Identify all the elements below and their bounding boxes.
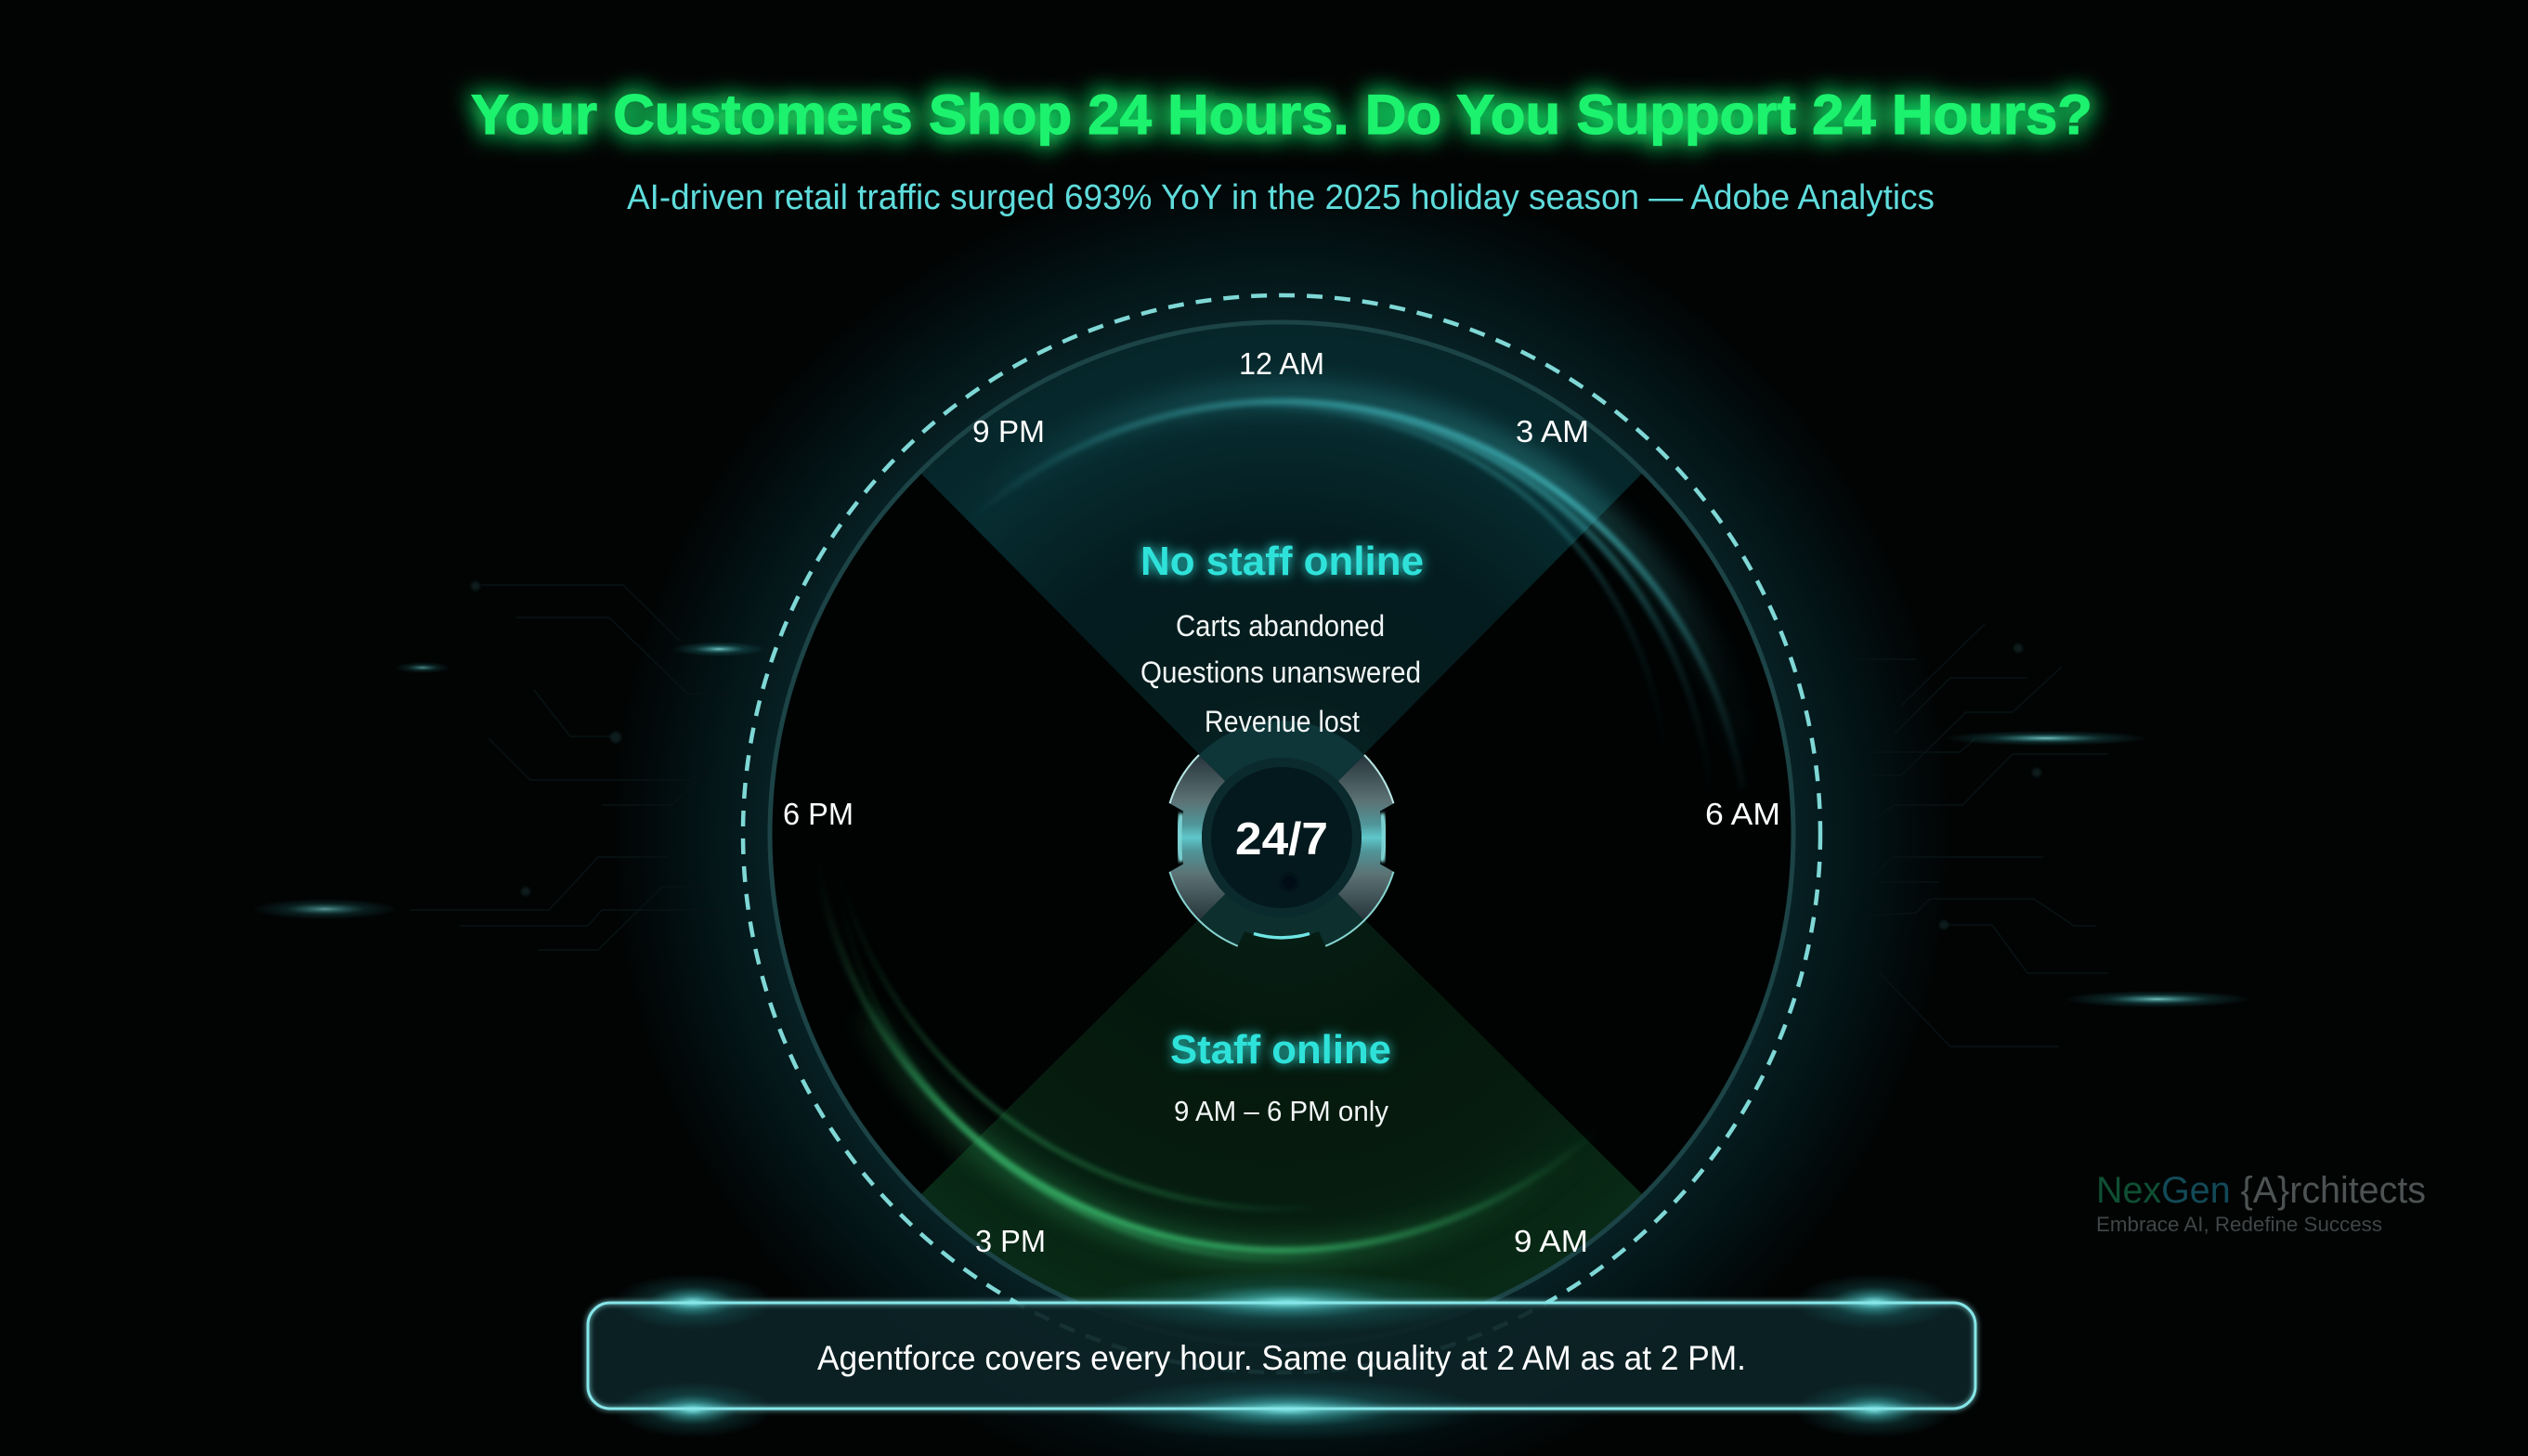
hour labels: 3 AM — [1516, 414, 1589, 448]
hub lower tint — [1173, 838, 1390, 946]
light streaks — [253, 642, 2250, 1008]
watermark logo: Embrace AI, Redefine Success — [2096, 1213, 2382, 1236]
teal light arcs — [958, 395, 1748, 798]
text block: staff online: Staff online — [1170, 1027, 1391, 1072]
panel: clock wheel — [743, 295, 1820, 1372]
hour labels: 9 PM — [972, 414, 1045, 448]
solid ring — [770, 322, 1793, 1346]
hour labels: 6 PM — [783, 797, 854, 831]
hub upper tint — [1199, 721, 1364, 838]
watermark logo — [2096, 1170, 2426, 1236]
callout bar — [588, 1270, 1975, 1441]
hour labels — [783, 346, 1780, 1258]
bar outline — [588, 1303, 1975, 1409]
hub cyan glows — [1179, 813, 1385, 938]
bar body — [588, 1303, 1975, 1409]
text block: no staff online: Questions unanswered — [1140, 656, 1421, 689]
hub rim highlights — [1170, 755, 1393, 946]
bar glow spots — [614, 1270, 1953, 1441]
hour labels: 12 AM — [1239, 346, 1324, 381]
text block: staff online — [1170, 1027, 1391, 1127]
text block: no staff online: No staff online — [1140, 539, 1424, 584]
subtitle: AI-driven retail traffic surged 693% YoY in the 2025 holiday season — Adobe Analytics — [627, 178, 1935, 217]
text block: no staff online: Revenue lost — [1205, 705, 1360, 738]
hour labels: 3 PM — [975, 1224, 1046, 1258]
hub right bracket — [1338, 755, 1393, 920]
text block: no staff online — [1140, 539, 1424, 738]
title: Your Customers Shop 24 Hours. Do You Support 24 Hours? — [471, 84, 2092, 146]
hour labels: 9 AM — [1514, 1224, 1588, 1258]
center hub: 24/7 — [1170, 721, 1393, 946]
text block: no staff online: Carts abandoned — [1176, 609, 1385, 643]
bar text: Agentforce covers every hour. Same quality at 2 AM as at 2 PM. — [817, 1339, 1746, 1377]
wedge: staff hours — [919, 838, 1644, 1346]
green light arcs — [827, 906, 1577, 1276]
hub left bracket — [1170, 755, 1225, 920]
dashed outer ring — [743, 295, 1820, 1372]
text block: staff online: 9 AM – 6 PM only — [1174, 1095, 1388, 1127]
hub inner discs — [1202, 758, 1362, 917]
clock face — [770, 322, 1793, 1346]
24/7 label: 24/7 — [1235, 814, 1328, 864]
hour labels: 6 AM — [1705, 797, 1780, 831]
circuit traces left and right — [410, 581, 2108, 1046]
watermark logo: NexGen {A}rchitects — [2096, 1170, 2426, 1211]
wedge: no staff hours — [919, 321, 1644, 838]
